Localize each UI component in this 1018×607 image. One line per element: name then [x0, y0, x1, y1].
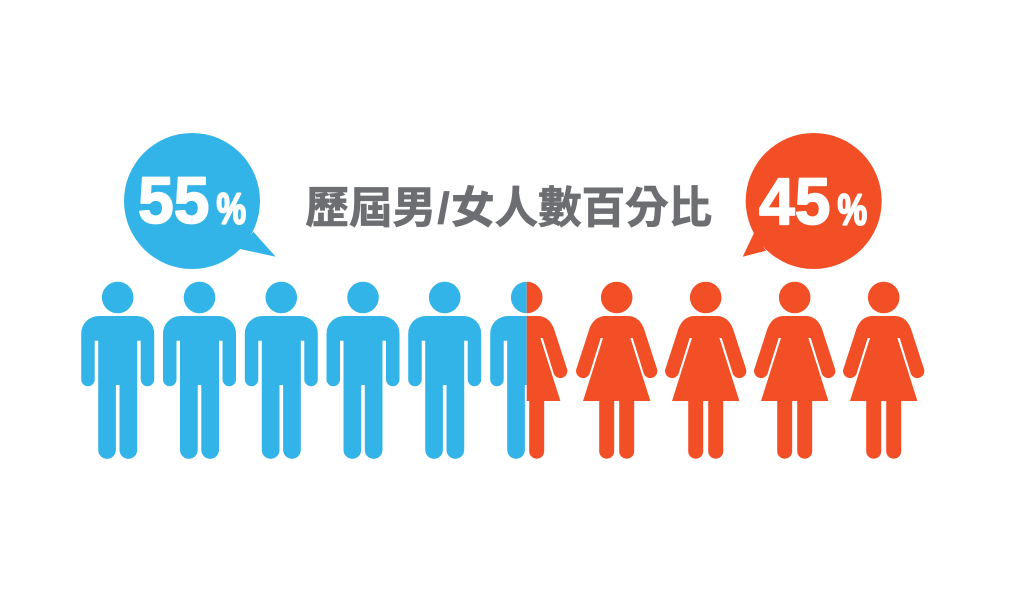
title: 歷屆男/女人數百分比 [306, 185, 712, 233]
icon: half man half woman [486, 282, 567, 459]
icon: man 5 [408, 282, 481, 459]
pictogram row: ten people [81, 282, 924, 459]
icon: man 4 [326, 282, 400, 459]
female percentage value: % [838, 186, 867, 235]
icon: woman 4 [843, 282, 924, 459]
male percentage value: 55 [138, 163, 209, 237]
icon: man 2 [163, 282, 236, 459]
icon: woman 3 [754, 282, 835, 459]
female percentage value: 45 [759, 164, 830, 238]
icon: man 3 [245, 282, 318, 459]
icon: man 1 [81, 282, 154, 459]
callout: male 55% speech bubble [124, 133, 276, 269]
callout: female 45% speech bubble [743, 133, 882, 269]
male percentage value [138, 163, 246, 237]
icon: woman 1 [576, 282, 657, 459]
female percentage value [759, 164, 867, 238]
icon: woman 2 [665, 282, 746, 459]
male percentage value: % [216, 185, 246, 234]
